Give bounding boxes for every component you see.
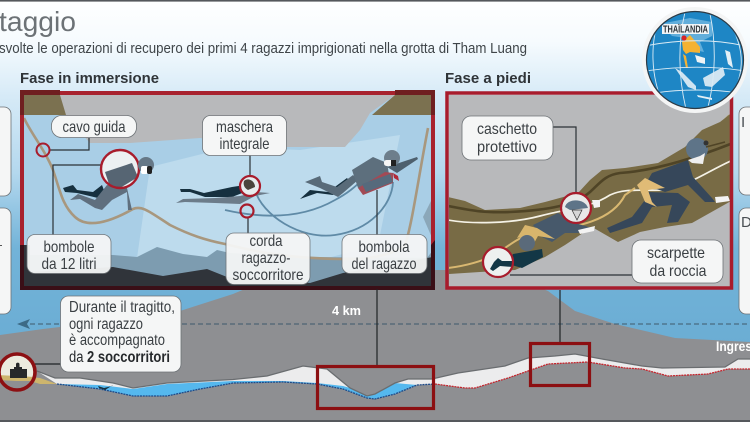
tiny diver	[98, 385, 113, 390]
cave ceiling olive	[24, 95, 432, 115]
heading: fase in immersione: Fase in immersione	[20, 70, 159, 87]
label: caschetto protettivo: protettivo	[477, 139, 537, 156]
diver 3	[300, 150, 418, 199]
callout: durante il tragitto: da 2 soccorritori	[69, 349, 170, 366]
label: scarpette da roccia: da roccia	[650, 263, 707, 280]
heading: fase a piedi: Fase a piedi	[445, 70, 531, 87]
label: caschetto protettivo: caschetto	[477, 121, 537, 138]
label: bombola del ragazzo: del ragazzo	[352, 256, 417, 273]
label: bombola del ragazzo	[342, 234, 427, 274]
detail box: fase in immersione	[318, 366, 434, 408]
white rope	[448, 160, 733, 223]
cave floor band	[111, 247, 431, 283]
label: corda ragazzo-soccorritore: ragazzo-	[242, 250, 290, 267]
dry floor line	[435, 362, 750, 388]
label: scarpette da roccia	[632, 240, 723, 283]
diver 1	[63, 150, 154, 210]
blue safety ropes	[255, 182, 393, 236]
panel frame	[447, 93, 732, 288]
label: corda ragazzo-soccorritore: corda	[250, 233, 283, 250]
label: scarpette da roccia: scarpette	[647, 245, 705, 262]
label: maschera integrale	[202, 116, 286, 156]
label: bombole da 12 litri: da 12 litri	[42, 256, 96, 273]
callout: durante il tragitto	[60, 296, 181, 372]
walker 2	[517, 193, 600, 251]
cave floor dark	[24, 245, 433, 286]
rope detail ring	[240, 204, 254, 218]
trapped group circle	[0, 352, 36, 393]
panel: fase in immersione	[20, 90, 435, 290]
locator globe	[642, 7, 748, 113]
land masses	[660, 18, 712, 52]
label backing	[662, 24, 709, 34]
label: bombole da 12 litri	[27, 234, 111, 274]
dashed route arrow	[17, 319, 750, 329]
callout: durante il tragitto: Durante il tragitto,	[69, 299, 175, 316]
panel frame	[22, 93, 433, 288]
label: bombole da 12 litri: bombole	[44, 239, 95, 256]
label: maschera integrale: integrale	[220, 136, 270, 153]
panel: fase a piedi	[447, 93, 733, 288]
leader lines	[510, 127, 632, 275]
callout: durante il tragitto: è accompagnato	[69, 332, 165, 349]
guide rope	[24, 118, 428, 259]
title: taggio	[0, 6, 76, 37]
Thailand	[682, 35, 700, 68]
walker 1	[607, 138, 730, 233]
label: caschetto protettivo	[462, 116, 553, 160]
small ring: cavo guida	[36, 144, 50, 156]
label: cavo guida: cavo guida	[62, 119, 126, 136]
right side info boxes	[739, 107, 750, 314]
water	[57, 381, 417, 399]
label: corda ragazzo-soccorritore: soccorritore	[232, 267, 304, 284]
meridians	[645, 12, 745, 109]
connector lines from panels to profile	[35, 289, 560, 365]
location dot	[681, 35, 687, 41]
cave passage	[448, 112, 733, 274]
sandy chamber floor	[30, 377, 57, 384]
cave air fill	[37, 354, 750, 399]
cave ceiling	[60, 95, 395, 147]
globe label: THAÏLANDIA	[663, 22, 708, 36]
walker 3 with boot	[483, 247, 543, 277]
submerged floor line	[57, 382, 435, 399]
cave profile	[30, 354, 750, 399]
dark crack line	[448, 143, 733, 212]
right side info boxes: I	[741, 114, 745, 131]
label: corda ragazzo-soccorritore	[226, 233, 310, 284]
label: bombola del ragazzo: bombola	[358, 239, 410, 256]
yellow rope	[448, 188, 635, 268]
frame dark corners	[20, 240, 435, 290]
lamp beam	[724, 114, 730, 119]
grey rock mass	[0, 270, 750, 422]
light beam	[137, 135, 400, 265]
distance label: 4 km	[332, 303, 361, 318]
label: maschera integrale: maschera	[216, 119, 273, 136]
diver 2	[176, 176, 270, 204]
callout: durante il tragitto: ogni ragazzo	[69, 316, 143, 333]
label: cavo guida	[52, 116, 136, 138]
right wall shade	[423, 201, 431, 235]
leader lines	[50, 138, 377, 235]
cave ceiling line	[37, 354, 750, 396]
detail box: fase a piedi	[530, 344, 590, 386]
subtitle: svolte le operazioni di recupero dei primi 4 ragazzi imprigionati nella grotta di Tham Luang	[0, 40, 527, 57]
left side info boxes	[0, 107, 11, 314]
